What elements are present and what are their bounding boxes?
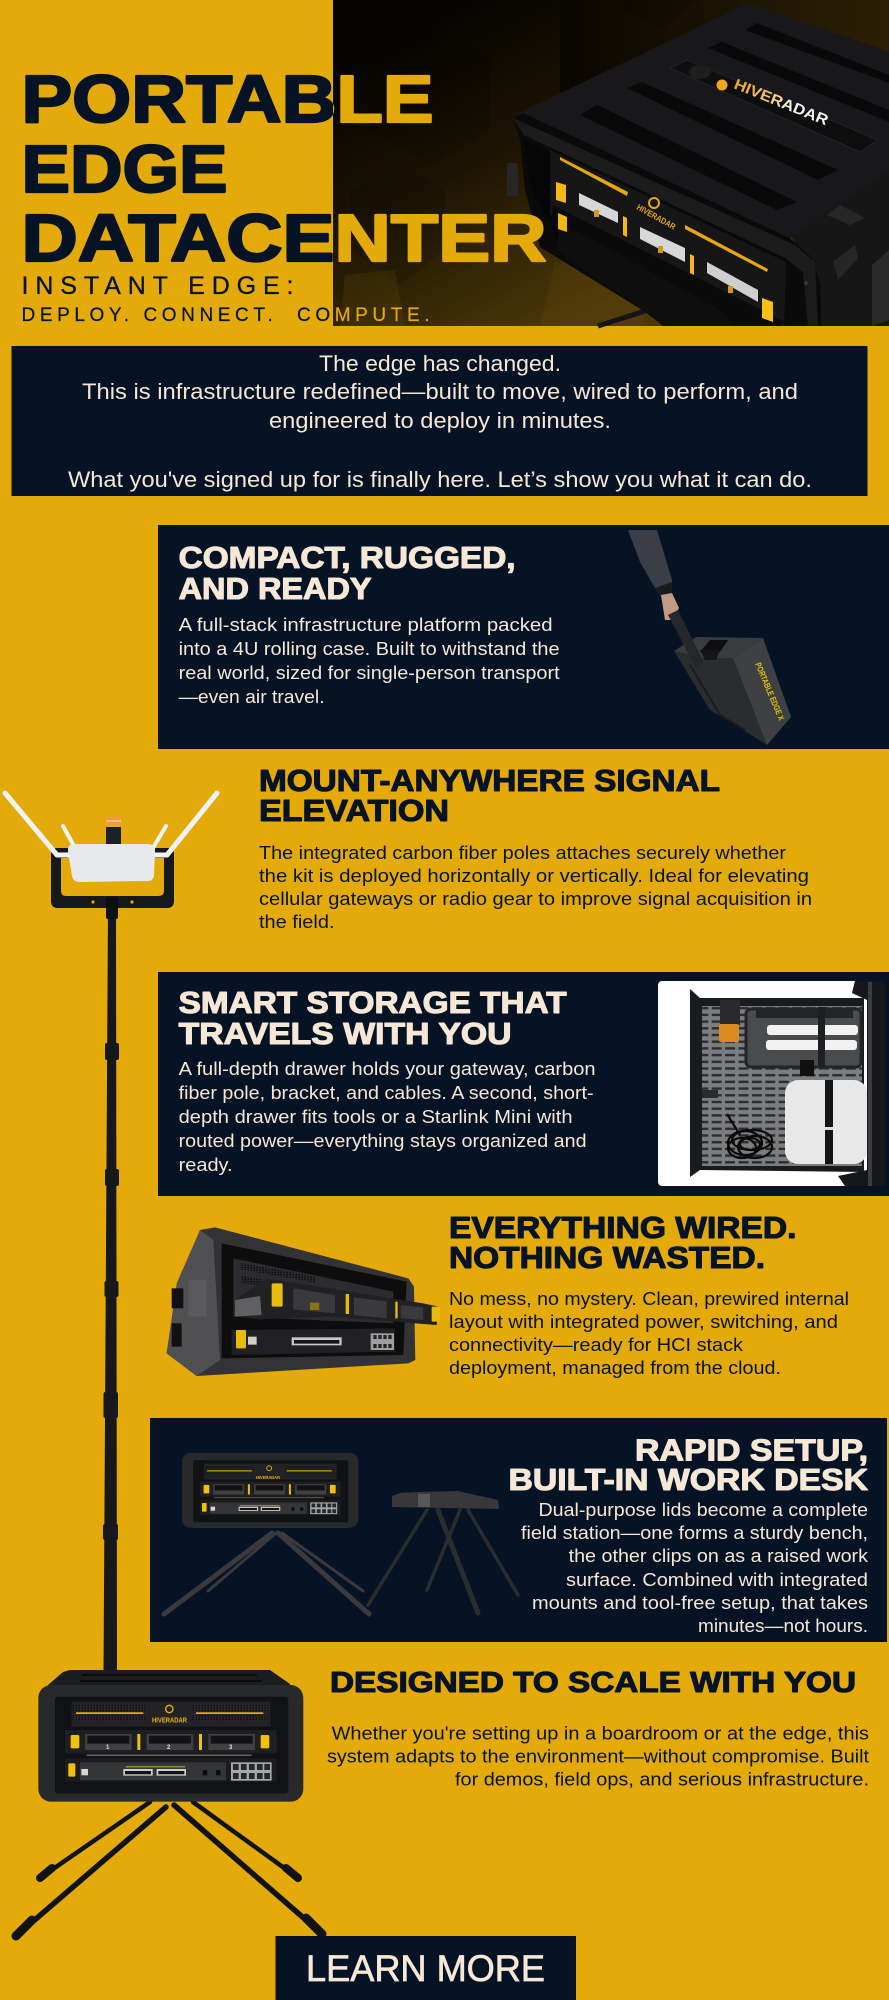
heading bbox=[179, 541, 516, 606]
heading: SMART STORAGE THAT bbox=[179, 986, 567, 1020]
heading: RAPID SETUP, bbox=[635, 1434, 868, 1468]
text block: designed to scale: system adapts to the environment—without compromise. Built bbox=[327, 1746, 869, 1766]
title: PORTABLE bbox=[22, 62, 434, 137]
product photo: rack on tripod: 3 bbox=[229, 1745, 233, 1751]
product photo: case on stand bbox=[164, 1453, 369, 1614]
text block: mount anywhere: the field. bbox=[259, 911, 334, 932]
product photo: rack on tripod: 2 bbox=[167, 1745, 171, 1751]
product photo: work desk bbox=[368, 1491, 518, 1613]
heading: mount anywhere bbox=[259, 764, 720, 828]
text block: everything wired: No mess, no mystery. Clean, prewired internal bbox=[449, 1288, 849, 1309]
panel: intro: engineered to deploy in minutes. bbox=[269, 408, 611, 433]
carbon fiber pole bbox=[103, 905, 119, 1675]
text block: ready. bbox=[179, 1154, 233, 1175]
title: DATACENTER bbox=[22, 201, 546, 276]
text block: real world, sized for single-person transport bbox=[179, 662, 560, 683]
title: EDGE bbox=[22, 132, 228, 207]
rack front bbox=[38, 1685, 303, 1802]
panel: intro bbox=[12, 346, 868, 496]
text block: mount anywhere: cellular gateways or radio gear to improve signal acquisition in bbox=[259, 888, 812, 909]
text block: mount anywhere bbox=[259, 842, 812, 932]
product photo: rack on tripod bbox=[16, 1670, 322, 1936]
panel: compact rugged bbox=[158, 525, 889, 749]
product photo: hero rack case bbox=[507, 3, 889, 326]
panel: intro: The edge has changed. bbox=[319, 351, 561, 376]
text block: routed power—everything stays organized and bbox=[179, 1130, 587, 1151]
text block: mount anywhere: the kit is deployed horizontally or vertically. Ideal for elevating bbox=[259, 865, 809, 886]
heading: COMPACT, RUGGED, bbox=[179, 541, 516, 575]
text block: surface. Combined with integrated bbox=[566, 1569, 868, 1590]
product photo: case on stand: HIVERADAR bbox=[256, 1475, 281, 1480]
text block bbox=[179, 614, 560, 707]
panel: smart storage bbox=[158, 972, 889, 1196]
text block: A full-stack infrastructure platform packed bbox=[179, 614, 553, 635]
text block: mount anywhere: The integrated carbon fiber poles attaches securely whether bbox=[259, 842, 786, 863]
subtitle bbox=[22, 272, 430, 326]
heading: mount anywhere: MOUNT-ANYWHERE SIGNAL bbox=[259, 764, 720, 798]
router on bracket bbox=[5, 793, 217, 919]
text block: designed to scale: for demos, field ops, and serious infrastructure. bbox=[455, 1768, 869, 1790]
panel: rapid setup bbox=[150, 1418, 887, 1642]
heading: AND READY bbox=[179, 572, 372, 606]
heading: BUILT-IN WORK DESK bbox=[508, 1463, 868, 1497]
product photo: open drawer bbox=[658, 981, 885, 1186]
heading bbox=[179, 986, 567, 1051]
product photo: rack on tripod: 1 bbox=[106, 1745, 110, 1751]
text block: mounts and tool-free setup, that takes bbox=[532, 1592, 868, 1613]
subtitle: INSTANT EDGE: bbox=[22, 272, 294, 300]
text block: Dual-purpose lids become a complete bbox=[538, 1499, 868, 1520]
text block: fiber pole, bracket, and cables. A second, short- bbox=[179, 1082, 594, 1103]
text block: minutes—not hours. bbox=[698, 1615, 868, 1636]
title bbox=[22, 62, 546, 276]
tripod legs bbox=[16, 1802, 322, 1936]
text block bbox=[179, 1058, 596, 1175]
button: learn more: LEARN MORE bbox=[306, 1948, 545, 1989]
text block: everything wired: layout with integrated power, switching, and bbox=[449, 1311, 838, 1332]
product photo: rolling case bbox=[628, 530, 791, 745]
text block: —even air travel. bbox=[179, 686, 325, 707]
logo on front bbox=[635, 198, 677, 232]
text block: the other clips on as a raised work bbox=[569, 1545, 869, 1566]
text block: everything wired: deployment, managed from the cloud. bbox=[449, 1357, 781, 1378]
panel: intro: What you've signed up for is finally here. Let’s show you what it can do. bbox=[68, 467, 812, 492]
subtitle: DEPLOY. CONNECT. COMPUTE. bbox=[22, 305, 430, 326]
product photo: rolling case: PORTABLE EDGE X bbox=[753, 661, 787, 722]
heading: designed to scale: DESIGNED TO SCALE WITH YOU bbox=[330, 1667, 856, 1699]
panel: intro: This is infrastructure redefined—built to move, wired to perform, and bbox=[82, 379, 798, 404]
product photo: rack on tripod: HIVERADAR bbox=[152, 1716, 187, 1724]
heading: everything wired: EVERYTHING WIRED. bbox=[449, 1211, 796, 1245]
text block bbox=[521, 1499, 869, 1636]
button: learn more bbox=[276, 1936, 576, 2000]
text block: A full-depth drawer holds your gateway, carbon bbox=[179, 1058, 596, 1079]
hero panel bbox=[333, 0, 889, 326]
text block: designed to scale bbox=[327, 1722, 869, 1790]
text block: everything wired bbox=[449, 1288, 849, 1378]
logo on front: HIVERADAR bbox=[635, 202, 677, 232]
text block: everything wired: connectivity—ready for HCI stack bbox=[449, 1334, 744, 1355]
heading: everything wired bbox=[449, 1211, 796, 1275]
text block: into a 4U rolling case. Built to withstand the bbox=[179, 638, 560, 659]
heading bbox=[508, 1434, 868, 1497]
text block: designed to scale: Whether you're setting up in a boardroom or at the edge, this bbox=[332, 1722, 869, 1744]
heading: TRAVELS WITH YOU bbox=[179, 1017, 512, 1051]
rack lid bbox=[48, 1670, 292, 1700]
heading: everything wired: NOTHING WASTED. bbox=[449, 1241, 765, 1275]
product photo: open rack case bbox=[167, 1227, 440, 1376]
logo on lid: HIVERADAR bbox=[732, 76, 831, 129]
heading: mount anywhere: ELEVATION bbox=[259, 794, 449, 828]
text block: field station—one forms a sturdy bench, bbox=[521, 1522, 868, 1543]
text block: depth drawer fits tools or a Starlink Mini with bbox=[179, 1106, 573, 1127]
